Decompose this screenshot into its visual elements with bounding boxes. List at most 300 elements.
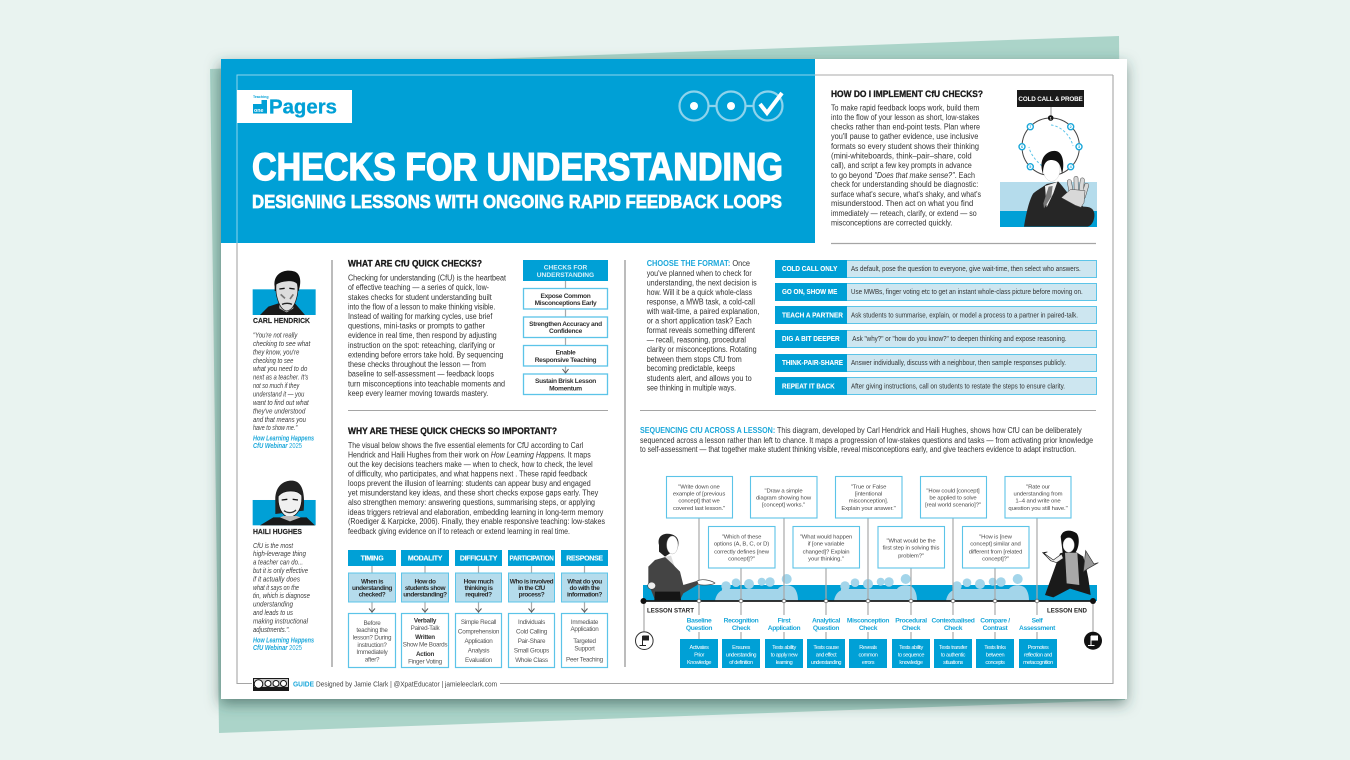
quote: Carl Hendrick: checking to see [253,356,293,365]
source: webinar citation: How Learning Happens [253,436,314,442]
column: difficulty: Evaluation [465,657,493,664]
source: webinar citation: CfU Webinar 2025 [253,443,302,450]
prompt: self assessment: "Rate our [1026,485,1050,491]
column: participation: Who is involved [510,578,554,585]
text block: definition: Instead of waiting for marking cycles, use brief [348,312,493,321]
text block: why paragraph: yet misunderstand key ideas, and these short checks expose gaps early. They [348,488,598,498]
prompt: misconception: misconception]. [849,499,889,505]
flow step: responsive teaching: Enable [556,349,576,356]
purpose: analytical [807,639,845,668]
text block: implementation paragraph: check for understanding should be diagnostic: [831,180,978,189]
column: response: Targeted [573,638,596,645]
heading: how do I implement: HOW DO I IMPLEMENT CfU CHECKS? [831,89,983,99]
quote: Haili Hughes: and leads to us [253,608,293,617]
step purpose boxes [680,639,1057,668]
text block: implementation paragraph: misunderstood. Then act on what you find [831,199,973,208]
flow header: CHECKS FOR [544,264,588,272]
text block: choose the format: students alert, and allows you to [647,374,752,383]
row: go on show me: GO ON, SHOW ME [782,289,838,296]
column: difficulty: required? [465,592,492,599]
quote: Carl Hendrick [253,330,311,432]
purpose: misconception [849,639,887,668]
prompt: first application: [concept] works." [762,503,805,509]
quote: Carl Hendrick: want to find out what [253,398,309,407]
column: participation: Small Groups [514,648,549,654]
label: lesson start: LESSON START [647,608,694,614]
step labels: Question [686,625,712,632]
text block: sequencing intro [640,426,1093,454]
text block: implementation paragraph: surface what's secure, what's shaky, and what's [831,190,981,199]
column: participation: Individuals [518,619,545,626]
step labels: Contextualised [931,617,975,624]
text block: why paragraph: loops prevent the illusion of learning: students can appear busy and engaged [348,479,591,488]
row: cold call only: As default, pose the question to everyone, give wait-time, then select who answers. [851,266,1081,273]
text block: choose the format: understanding, the next decision is [647,278,757,288]
column: timing: Immediately [356,649,389,656]
purpose: procedural: knowledge [899,660,923,666]
prompt: analytical: your thinking." [808,556,844,562]
text block: implementation paragraph [831,104,981,228]
text block: choose the format: between them stops CfU from [647,355,742,364]
text block: why paragraph: feedback giving evidence on if to reteach or extend learning in real time. [348,527,570,536]
numbered student nodes: 4 [1070,165,1073,169]
row: think pair share: Answer individually, discuss with a neighbour, then sample responses publicly. [851,360,1066,367]
text block: definition: these checks throughout the lesson — from [348,360,486,369]
purpose: contextualised: to authentic [941,652,966,658]
panel: expert sidebar [253,271,316,652]
prompt: analytical [793,526,860,568]
text block: implementation paragraph: you'll pause to gather evidence, use inclusive [831,132,979,141]
text block: implementation paragraph: to go beyond "Does that make sense?". Each [831,171,975,180]
numbered student nodes: 3 [1078,145,1080,149]
step labels: Check [732,625,751,632]
column: timing: after? [365,656,380,664]
students: group three [946,574,1029,601]
row: cold call only [775,260,1096,278]
icon: creative commons badge [253,678,289,691]
text block: definition: Checking for understanding (CfU) is the heartbeat [348,274,507,282]
row: go on show me [775,283,1096,301]
column: modality: Show Me Boards [403,642,447,648]
logo: Teaching One Pagers [237,90,352,123]
purpose: misconception: Reveals [859,645,877,651]
step labels: Check [902,625,921,632]
panel: choose the format [646,259,1096,395]
text block: why paragraph: The visual below shows the five essential elements for CfU according to Carl [348,441,583,450]
numbered student nodes: 2 [1070,125,1072,129]
panel: what are CfU quick checks [348,258,608,398]
step labels: First [778,617,791,624]
logo: Teaching One Pagers: Teaching [253,95,269,99]
column: difficulty: Analysis [468,648,489,654]
column: timing: lesson? During [353,634,392,642]
flow step: brisk momentum: Momentum [549,385,582,392]
row: teach a partner [775,306,1096,324]
quote: Haili Hughes: adjustments.". [253,625,290,634]
figure: teacher at lesson end [1043,531,1098,597]
purpose: baseline: Knowledge [687,660,711,666]
quote: Carl Hendrick: next as a teacher. It's [253,373,309,382]
column: modality: MODALITY [408,556,443,562]
text block: definition: baseline to self-assessment — feedback loops [348,370,494,379]
text block: implementation paragraph: immediately — reteach, clarify, or extend — so [831,209,977,218]
text block: choose the format: with wait-time, a paired explanation, [646,307,759,316]
purpose: self assessment: reflection and [1024,652,1052,658]
prompt: contextualised: "How could [concept] [926,488,980,494]
purpose: procedural: Tests ability [899,645,923,651]
quote: Carl Hendrick: have to show me." [253,423,298,432]
panel: sequencing CfU across a lesson [636,426,1102,668]
step labels: Check [944,625,963,632]
column: response: RESPONSE [566,556,603,562]
column: timing: understanding [352,585,392,592]
text block: choose the format: CHOOSE THE FORMAT: Once [647,259,751,268]
students: group two [834,574,917,601]
step labels: Contrast [983,625,1008,632]
column: difficulty: DIFFICULTY [460,556,498,562]
prompt: contextualised: [real world scenario]?" [925,503,981,509]
column: response: information? [567,592,602,599]
quote: Carl Hendrick: they've understood [253,406,306,415]
column: modality: Written [415,634,435,641]
prompt: baseline: example of [previous [673,492,725,498]
numbered student nodes: 5 [1029,165,1031,169]
column: participation: process? [519,592,545,599]
quote: Carl Hendrick: and that means you [253,415,306,424]
text block: choose the format: format reveals something different [647,326,756,335]
row: think pair share [775,354,1096,372]
purpose: procedural [892,639,930,668]
column: modality: understanding? [403,592,447,599]
text block: choose the format: becoming predictable, keeps [647,364,735,373]
text block: choose the format: response, a MWB task, a cold-call [647,298,755,306]
flow header: UNDERSTANDING [537,272,594,279]
flow step: expose misconceptions: Misconceptions Early [535,300,597,307]
purpose: recognition: understanding [726,652,756,658]
row: dig a bit deeper [775,330,1096,348]
prompt: recognition: concept]?" [728,556,755,562]
text block: why paragraph: out the key decisions teachers make — when to check, how to check, the level [348,460,593,469]
step labels: Analytical [812,617,841,624]
purpose: contextualised: situations [943,660,963,666]
row: cold call only: COLD CALL ONLY [782,266,838,273]
prompt: misconception: "True or False [851,485,887,491]
purpose: first application [765,639,803,668]
quote: Haili Hughes: tin, which is diagnose [253,591,310,600]
text block: why paragraph: Hendrick and Haili Hughes from their work on How Learning Happens. It maps [348,450,591,460]
quote: Haili Hughes: making instructional [253,616,308,625]
text block: implementation paragraph: misconceptions are corrected quickly. [831,218,952,228]
column: participation [508,550,555,668]
text block: why paragraph: of difficulty, who participates, and what happens next . These rapid feedback [348,470,588,478]
text block: implementation paragraph: into the flow of your lesson as short, low-stakes [831,113,979,122]
column: timing: When is [361,578,384,585]
numbered student nodes [1019,115,1082,170]
column: modality: How do [414,578,436,585]
text block: sequencing intro: to self-assessment — that together make student thinking visible, reveal misconceptions early, and give teachers evidence to adapt instruction. [640,445,1076,454]
text block: definition: turn misconceptions into teachable moments and [348,379,505,388]
text block: why paragraph: also strengthen memory: answering questions, summarising steps, or applying [348,498,595,507]
prompt: first application: diagram showing how [756,495,812,501]
purpose: self assessment: metacognition [1023,660,1053,666]
purpose: recognition: Ensures [732,645,750,651]
flow step: expose misconceptions [524,288,608,309]
column: difficulty: thinking is [464,585,493,592]
text block: choose the format: or a short application task? Each [647,316,752,326]
prompt: first application [750,476,817,518]
text block: definition: questions, mini-tasks or prompts to gather [348,322,485,331]
credit text: Designed by Jamie Clark | @XpatEducator | jamieleeclark.com [316,680,497,688]
purpose: analytical: understanding [811,660,841,666]
quote: Haili Hughes: understanding [253,600,294,609]
text block: choose the format: see thinking in multiple ways. [647,384,736,392]
column: difficulty: How much [464,578,494,585]
column: response: Support [574,646,595,652]
purpose: self assessment: Promotes [1028,645,1049,651]
text block: implementation paragraph: formats so every student shows their thinking [831,142,979,151]
quote: Carl Hendrick: checking to see what [253,339,311,348]
column: response: Application [570,626,599,633]
prompt: self assessment: understanding from [1014,492,1063,498]
flow step: accuracy and confidence [524,317,608,338]
step labels: Application [768,625,801,632]
name: Carl Hendrick: CARL HENDRICK [253,316,311,325]
quote: Haili Hughes [253,541,310,634]
flow step: brisk momentum [524,374,608,394]
prompt: misconception [836,476,902,518]
text block: definition: into the flow of a lesson to make thinking visible. [348,302,495,311]
purpose: compare: Tests links [984,645,1006,651]
text block: choose the format: — recall, reasoning, procedural [647,336,746,344]
flow step: responsive teaching: Responsive Teaching [535,357,597,364]
icon: end flag [1084,632,1102,650]
connector lines [644,518,1093,639]
flow step: accuracy and confidence: Strengthen Accuracy and [529,321,602,328]
column: difficulty: Simple Recall [461,619,496,626]
flow step: expose misconceptions: Expose Common [541,293,591,300]
purpose: self assessment [1019,639,1057,668]
column: difficulty: Comprehension [458,628,500,636]
panel: why are these quick checks so important [348,426,608,668]
column: participation: in the CfU [518,585,546,592]
text block: definition: of effective teaching — a series of quick, low- [348,283,489,292]
column: response: Immediate [571,619,599,626]
row: think pair share: THINK-PAIR-SHARE [782,360,843,367]
prompt: baseline [666,476,732,518]
name: Haili Hughes: HAILI HUGHES [253,527,302,536]
heading: what are CfU quick checks: WHAT ARE CfU QUICK CHECKS? [348,258,482,268]
prompt: procedural: problem?" [898,553,924,559]
column: timing: teaching the [356,627,388,634]
prompt: compare: concept] similar and [970,542,1021,548]
top row question prompts [666,476,1071,518]
step labels: Recognition [724,617,759,624]
step labels [686,617,1056,632]
column: timing: TIMING [361,556,384,562]
flowchart: checks for understanding [523,260,608,394]
quote: Haili Hughes: a teacher can do... [253,558,303,567]
row: repeat it back [775,377,1096,395]
text block: choose the format [646,259,759,392]
figure: man with raised hand [1024,151,1094,227]
text block: why paragraph: ideas triggers retrieval and elaboration, embedding learning in long-term memory [348,508,603,517]
step labels: Procedural [895,617,927,624]
subtitle: DESIGNING LESSONS WITH ONGOING RAPID FEEDBACK LOOPS [252,192,782,212]
column: response: What do you [567,578,602,585]
row: repeat it back: REPEAT IT BACK [782,384,835,390]
portrait: Carl Hendrick [253,271,316,315]
step labels: Check [859,625,878,632]
purpose: compare [976,639,1014,668]
portrait: Haili Hughes [253,481,316,525]
icon: three loop check circles [680,92,782,120]
prompt: compare: "How is [new [979,535,1013,541]
text block: definition: evidence in real time, then respond by adjusting [348,331,497,340]
prompt: procedural: "What would be the [886,538,936,544]
label: lesson end: LESSON END [1047,608,1087,614]
text block: choose the format: clarity or misconceptions. Rotating [647,345,757,354]
quote: Haili Hughes: high-leverage thing [253,549,307,558]
quote: Haili Hughes: what it says on the [253,583,299,592]
prompt: recognition: "Which of these [722,535,762,541]
prompt: self assessment [1005,476,1071,518]
purpose: baseline [680,639,718,668]
row: go on show me: Use MWBs, finger voting etc to get an instant whole-class picture before moving on. [851,289,1083,296]
text block: implementation paragraph: To make rapid feedback loops work, build them [831,104,980,112]
prompt: compare: concept]?" [982,556,1009,562]
text block: definition: keep every learner moving towards mastery. [348,389,488,398]
numbered student nodes: 1 [1050,116,1052,120]
text block: sequencing intro: sequenced across a lesson rather than left to chance. It maps a progression of low-stakes questions and tasks — from activating prior knowledge [640,436,1093,445]
text block: implementation paragraph: (mini-whiteboards, think–pair–share, cold [831,152,972,160]
row: teach a partner: TEACH A PARTNER [782,312,843,320]
row: repeat it back: After giving instructions, call on students to restate the steps to ensure clarity. [851,384,1065,391]
prompt: misconception: [intentional [855,492,882,498]
column: modality: Action [416,651,434,658]
purpose: contextualised: Tests transfer [939,645,968,651]
column: response: Peer Teaching [566,656,604,664]
prompt: self assessment: 1–4 and write one [1015,499,1061,505]
column: difficulty [455,550,502,668]
column: response [561,550,608,668]
flow header [523,260,608,281]
column: modality: Verbally [414,618,437,624]
prompt: analytical: changed]? Explain [803,549,849,555]
prompt: baseline: covered last lesson." [673,506,725,512]
icon: start flag [636,632,653,650]
prompt: compare: different from [related [969,549,1022,555]
logo: Teaching One Pagers: Pagers [269,96,337,118]
column: modality: students show [405,585,446,592]
prompt: contextualised [920,476,986,518]
row: teach a partner: Ask students to summarise, explain, or model a process to a partner in paired-talk. [851,313,1078,320]
flow step: responsive teaching [524,346,608,366]
prompt: self assessment: question you still have." [1008,506,1068,512]
row: dig a bit deeper: Ask "why?" or "how do you know?" to deepen thinking and expose reasoning. [852,336,1067,343]
purpose: compare: between [986,652,1004,658]
source: webinar citation: How Learning Happens [253,638,314,644]
column: modality: Finger Voting [408,658,443,666]
heading: why important: WHY ARE THESE QUICK CHECKS SO IMPORTANT? [348,426,557,436]
prompt: baseline: concept] that we [678,499,720,505]
source: webinar citation [253,638,314,652]
timeline axis [640,598,1096,604]
quote: Carl Hendrick: not so much if they [253,381,300,390]
purpose: analytical: Tests cause [813,645,839,651]
illustration: cold call and probe [1000,90,1097,227]
source: webinar citation [253,436,314,450]
step labels: Question [813,625,839,632]
row: dig a bit deeper: DIG A BIT DEEPER [782,336,840,343]
flow step: accuracy and confidence: Confidence [549,328,583,335]
quote: Haili Hughes: but it is only effective [253,566,308,575]
page sheet [221,59,1127,699]
step labels: Baseline [687,617,712,624]
page frame [237,75,1113,684]
credit text: GUIDE [293,680,314,688]
column: timing: checked? [359,592,386,599]
step labels: Self [1032,617,1044,624]
prompt: misconception: Explain your answer." [841,506,896,512]
purpose: misconception: errors [862,660,875,666]
header banner [221,59,1113,243]
column: response: do with the [570,585,600,592]
column: participation: Whole Class [515,657,548,664]
step labels: Compare / [980,617,1010,624]
quote: Carl Hendrick: they know, you're [253,347,299,356]
prompt: first application: "Draw a simple [764,488,803,494]
step labels: Assessment [1019,625,1056,632]
text block: sequencing intro: SEQUENCING CfU ACROSS A LESSON: This diagram, developed by Carl Hendrick and Haili Hughes, shows how CfU can be deliberately [640,426,1082,435]
purpose: misconception: common [858,652,878,658]
prompt: recognition: correctly defines [new [714,549,770,555]
text block: definition: stakes checks for student understanding built [348,293,492,302]
label: cold call and probe: COLD CALL & PROBE [1018,96,1083,103]
panel: how do I implement [831,89,1097,228]
figure: teacher at lesson start [648,534,715,600]
purpose: recognition [722,639,760,668]
diagram: lesson timeline [636,476,1102,668]
quote: Carl Hendrick: what you need to do [253,364,307,373]
column: timing [348,550,396,668]
text block: choose the format: you've planned when to check for [647,269,752,278]
step labels: Misconception [847,617,889,624]
purpose: contextualised [934,639,972,668]
purpose: baseline: Activates [689,645,709,651]
column: participation: Cold Calling [516,628,548,636]
footer credit [253,678,497,691]
title: CHECKS FOR UNDERSTANDING [252,146,783,189]
prompt: baseline: "Write down one [678,485,721,491]
text block: choose the format: how. Will it be a quick whole-class [647,288,752,297]
numbered student nodes: 7 [1029,125,1031,129]
prompt: recognition: options (A, B, C, or D) [714,542,769,548]
source: webinar citation: CfU Webinar 2025 [253,645,302,652]
prompt: procedural [878,526,944,568]
column: modality [401,550,449,668]
text block: definition [348,274,507,398]
logo: Teaching One Pagers: one [254,108,263,114]
quote: Haili Hughes: CfU is the most [253,541,294,550]
timeline background band [643,585,1097,601]
column: participation: Pair-Share [518,638,546,645]
purpose: procedural: to sequence [898,652,924,658]
purpose: recognition: of definition [729,660,753,666]
numbered student nodes: 6 [1021,145,1023,149]
flow step: brisk momentum: Sustain Brisk Lesson [535,378,596,385]
text block: why paragraph [348,441,605,536]
prompt: procedural: first step in solving this [883,546,939,552]
